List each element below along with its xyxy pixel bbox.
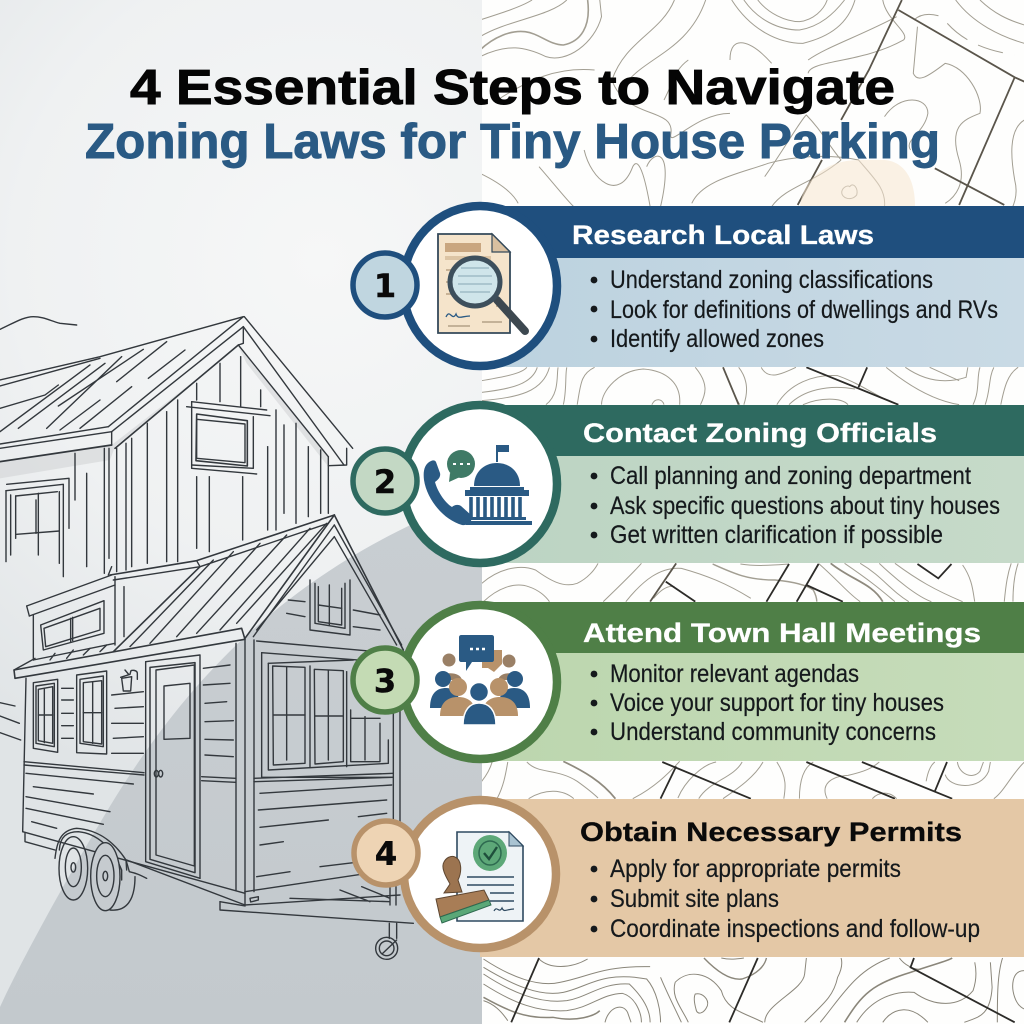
icon: meeting group	[430, 635, 530, 725]
number badge	[353, 253, 417, 317]
panel: step 2 contact zoning officials	[353, 405, 1024, 563]
door	[146, 655, 200, 878]
lower left window	[6, 478, 69, 577]
bullet list: Coordinate inspections and follow-up	[610, 915, 980, 943]
bullet list: Apply for appropriate permits	[610, 855, 901, 883]
bullet list: Voice your support for tiny houses	[610, 689, 944, 717]
front big window	[262, 653, 393, 777]
number badge: 4	[375, 835, 397, 873]
number badge: 2	[374, 463, 396, 501]
grey swoosh	[0, 495, 482, 1024]
parcel boundary lines: top area	[798, 0, 1024, 205]
panel: step 3 attend town hall meetings	[353, 602, 1024, 761]
icon: permit document and stamp	[436, 832, 523, 923]
icon: phone and capitol building	[424, 445, 532, 525]
heading: Attend Town Hall Meetings	[583, 618, 981, 648]
number badge	[353, 648, 417, 712]
bullet list: Identify allowed zones	[610, 325, 824, 353]
large icon circle	[404, 800, 556, 948]
trailer wheels and fender	[55, 828, 147, 911]
large icon circle	[403, 605, 557, 759]
bullet list: Understand community concerns	[610, 718, 936, 746]
gable shading	[0, 347, 328, 478]
title	[85, 61, 940, 169]
bullet list: Understand zoning classifications	[610, 266, 933, 294]
bullet list	[591, 855, 980, 943]
heading: Contact Zoning Officials	[583, 418, 937, 448]
side windows	[33, 671, 107, 754]
hill outline	[0, 317, 77, 329]
bullet list: Call planning and zoning department	[610, 462, 971, 490]
heading: Obtain Necessary Permits	[580, 817, 962, 847]
parcel boundary lines: gaps and bottom	[511, 367, 1015, 1022]
contour lines: bottom area	[483, 958, 1024, 1022]
right panel: white map background	[482, 0, 1024, 1024]
number badge	[354, 821, 418, 885]
road lines	[0, 703, 21, 740]
contour lines: gap three	[482, 761, 1024, 799]
bullet list	[591, 266, 998, 353]
back house sketch	[0, 317, 353, 577]
band background	[480, 799, 1024, 957]
bullet list: Monitor relevant agendas	[610, 660, 859, 688]
icon: document with magnifier	[438, 234, 525, 333]
wall lamp	[121, 670, 137, 691]
front tiny house on trailer	[0, 515, 413, 959]
panel: step 4 obtain necessary permits	[354, 799, 1024, 957]
number badge	[353, 449, 417, 513]
gable window	[310, 580, 350, 635]
panel: step 1 research local laws	[353, 206, 1024, 367]
bullet list	[591, 660, 944, 746]
number badge: 1	[374, 267, 396, 305]
title line two: Zoning Laws for Tiny House Parking	[85, 115, 940, 169]
heading: Research Local Laws	[572, 220, 874, 250]
contour lines: gap one	[482, 367, 1018, 405]
contour lines: top area	[480, 0, 1024, 210]
band body	[480, 258, 1024, 367]
number badge: 3	[374, 662, 396, 700]
band body	[480, 653, 1024, 761]
roof	[14, 515, 403, 678]
large icon circle	[403, 405, 557, 563]
walls and siding	[23, 600, 413, 923]
large icon circle	[403, 206, 557, 366]
band header	[480, 602, 1024, 653]
bullet list	[591, 462, 1000, 549]
illustration: tiny houses line drawing	[0, 317, 413, 959]
bullet list: Get written clarification if possible	[610, 521, 943, 549]
left panel: soft grey background	[0, 0, 482, 1024]
accent patch behind map	[800, 160, 915, 206]
hitch and jack wheel	[290, 887, 398, 959]
dormer	[14, 575, 124, 670]
topographic contour map	[480, 0, 1024, 1022]
title line one: 4 Essential Steps to Navigate	[130, 61, 895, 115]
band body	[480, 456, 1024, 563]
upper gable window	[187, 402, 270, 474]
band header	[480, 206, 1024, 258]
band header	[480, 405, 1024, 456]
contour lines: gap two	[482, 563, 1018, 602]
bullet list: Submit site plans	[610, 885, 779, 913]
